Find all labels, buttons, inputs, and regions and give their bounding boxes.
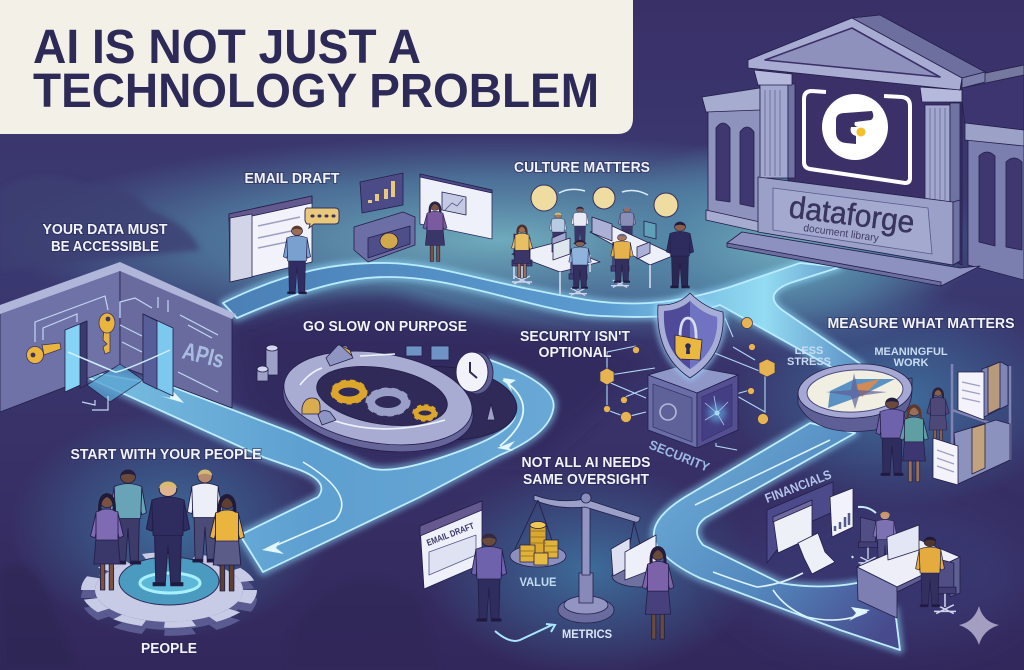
shield [655, 290, 726, 381]
building: dataforge document library [702, 15, 1024, 286]
gear: gold large [333, 382, 365, 402]
icon: clock [456, 352, 493, 394]
icon: padlock [675, 318, 702, 360]
path arrows [160, 378, 870, 621]
speech bubble [305, 208, 339, 228]
heading: not all ai needs same oversight: NOT ALL AI NEEDS [522, 455, 651, 471]
panel: email draft window [229, 196, 339, 294]
compass star needle [826, 373, 895, 409]
large screen [420, 174, 492, 239]
label: people: PEOPLE [141, 641, 197, 657]
binders: document shelves [933, 362, 1010, 485]
computers [552, 217, 656, 260]
wall: circuit lines [35, 296, 218, 410]
label: meaningful work [874, 346, 948, 369]
name: dataforge: dataforge [787, 189, 917, 240]
heading: go slow on purpose: GO SLOW ON PURPOSE [303, 319, 467, 335]
panel: financials [767, 482, 999, 645]
wall: right face [120, 267, 232, 408]
financial dashboard [767, 482, 853, 563]
bubble arrows [559, 189, 648, 195]
scale strings [515, 500, 647, 570]
network lines [606, 318, 765, 450]
heading: email draft: EMAIL DRAFT [244, 171, 340, 187]
building: name plinth [758, 177, 960, 265]
glowing paths [67, 263, 900, 650]
wall: top rim [0, 262, 236, 319]
label: value: VALUE [520, 575, 556, 589]
name: document library: document library [803, 222, 880, 245]
building: left column [754, 70, 795, 178]
icon: storage cylinders [257, 345, 278, 381]
man blue [569, 240, 591, 295]
browser window [229, 196, 312, 282]
gear centre pool [119, 557, 219, 605]
man yellow [934, 559, 956, 614]
person [283, 226, 311, 294]
lower binder row [933, 420, 1010, 485]
desk legs [514, 255, 650, 294]
scale stand [534, 493, 640, 623]
label: financials: FINANCIALS [763, 467, 834, 506]
building: steps [727, 232, 980, 286]
network nodes [600, 318, 775, 424]
heading: start with your people: START WITH YOUR PEOPLE [70, 447, 262, 463]
heading: measure what matters: MEASURE WHAT MATTERS [828, 316, 1015, 332]
paper receipt [798, 533, 835, 574]
platform ring [276, 339, 480, 464]
person [642, 546, 674, 639]
label: meaningful work: WORK [894, 357, 928, 369]
panel: culture matters team [512, 185, 694, 295]
seated colleagues [549, 207, 636, 250]
email draft window [420, 501, 482, 589]
heading: your data must be accessible [42, 222, 168, 255]
safe [648, 365, 738, 448]
icon: key vertical [99, 313, 115, 354]
platform: people gear [88, 470, 250, 633]
man yellow [611, 234, 633, 287]
logo: dataforge mark [804, 91, 910, 183]
heading: security isn't optional: SECURITY ISN'T [520, 329, 630, 345]
trend arrow [495, 624, 555, 641]
desk left [512, 243, 600, 272]
man standing [666, 222, 694, 288]
desk right [590, 225, 675, 265]
building: left wing [702, 88, 762, 232]
gear: silver [368, 390, 408, 414]
gear: gold small [414, 406, 436, 420]
icon bubbles [531, 185, 678, 217]
ring highlights [300, 354, 445, 429]
monitor [887, 525, 919, 560]
building: pediment [748, 15, 985, 90]
path: upper walkway and branch to compass [223, 263, 862, 372]
heading: not all ai needs same oversight: SAME OVERSIGHT [523, 472, 649, 488]
arrow to desk [852, 507, 876, 558]
title line 2: TECHNOLOGY PROBLEM [33, 65, 599, 118]
security: shield safe network [600, 290, 775, 450]
chart bars [835, 513, 849, 531]
document lines [937, 382, 980, 472]
heading: security isn't optional: OPTIONAL [538, 345, 612, 361]
heading: your data must be accessible: BE ACCESSIBLE [51, 239, 159, 255]
label: less stress: STRESS [787, 356, 831, 368]
building: right wing [960, 65, 1024, 280]
panel: dashboards [354, 173, 492, 262]
left pan coins [510, 522, 566, 567]
path: lower right walkway [654, 423, 900, 650]
wall: door openings [65, 314, 173, 402]
woman and monitor desk [857, 512, 960, 618]
icon: key horizontal [26, 343, 61, 364]
small tokens [302, 345, 495, 425]
title line 1: AI IS NOT JUST A [33, 21, 421, 74]
people: compass team [876, 387, 949, 482]
heading: culture matters: CULTURE MATTERS [514, 160, 650, 176]
shelf frame [952, 364, 1010, 478]
desk [857, 540, 960, 618]
woman yellow [512, 224, 532, 284]
sparkle [959, 606, 999, 645]
platform: compass [797, 361, 913, 432]
API wall [0, 262, 236, 412]
platform: go slow spiral [276, 339, 520, 464]
dark back platform [370, 361, 520, 445]
title panel [0, 0, 633, 134]
data console [354, 212, 415, 262]
building: right column [920, 87, 962, 205]
label: APIs: APIs [180, 338, 227, 374]
heading: not all ai needs same oversight [522, 455, 651, 488]
heading: your data must be accessible: YOUR DATA MUST [42, 222, 168, 238]
label: meaningful work: MEANINGFUL [874, 346, 948, 358]
building: back wall [788, 70, 962, 265]
safe circuit glow [705, 396, 728, 425]
label: security: SECURITY [647, 437, 712, 475]
label: less stress [787, 345, 831, 368]
heading: security isn't optional [520, 329, 630, 361]
top binder row [958, 362, 1008, 420]
wall: left face [0, 267, 120, 412]
path: accessible data walkway and slow loop [67, 360, 554, 572]
text lines [258, 217, 300, 248]
right pan docs [611, 535, 668, 587]
label: metrics: METRICS [562, 627, 612, 641]
panel: oversight balance [420, 493, 674, 641]
person [471, 534, 507, 621]
person [423, 201, 447, 262]
light beam [68, 350, 170, 372]
label: less stress: LESS [795, 345, 823, 357]
bar chart screen [360, 173, 403, 213]
team [90, 470, 244, 591]
window title: EMAIL DRAFT [425, 520, 476, 548]
